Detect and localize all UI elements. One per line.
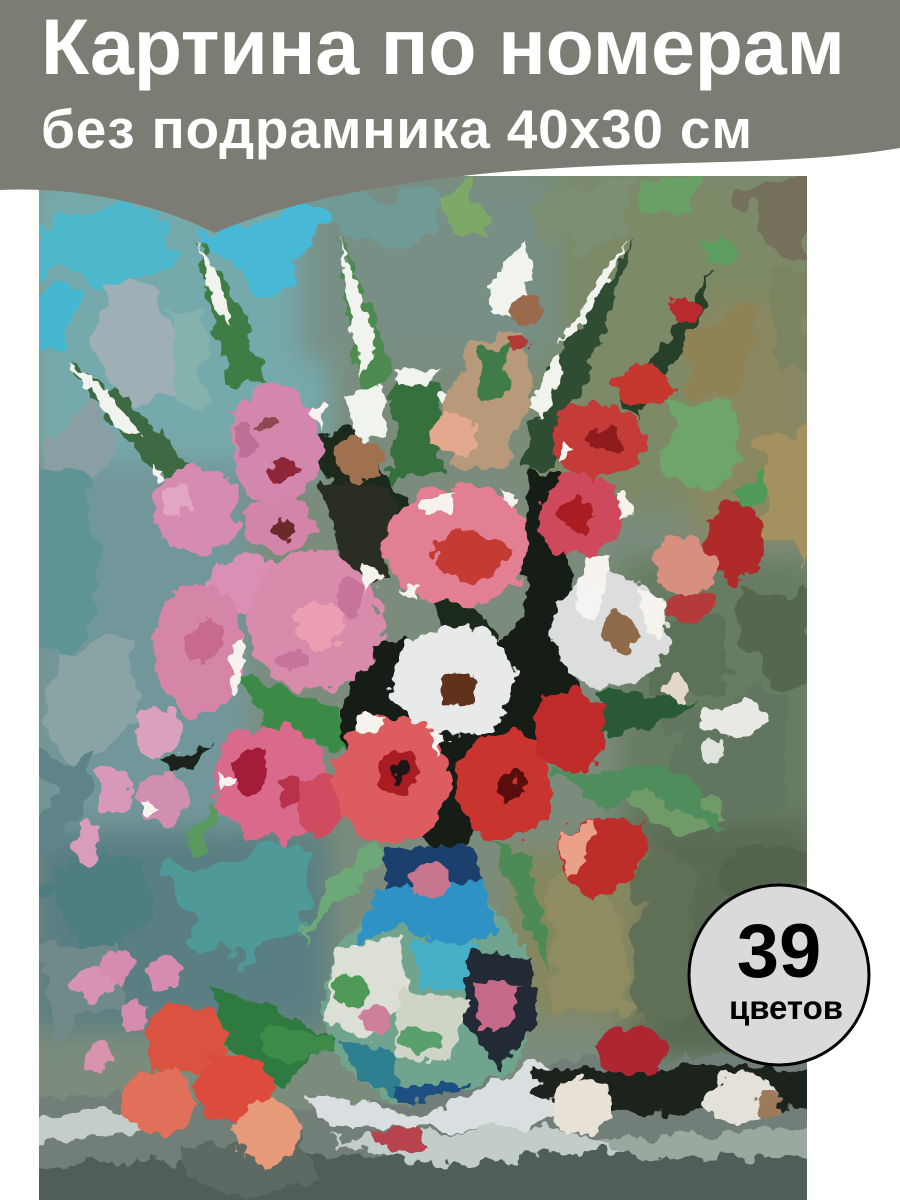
red flowers xyxy=(334,690,645,900)
header banner xyxy=(0,0,900,233)
red gladiolus flowers xyxy=(538,404,765,624)
badge: 39 colours: 39 xyxy=(737,909,821,994)
white leaf highlights xyxy=(68,237,630,445)
vase xyxy=(320,845,538,1108)
fallen flowers xyxy=(66,950,782,1164)
paint highlights on flowers xyxy=(140,400,665,820)
title: Картина по номерам xyxy=(41,2,845,91)
badge: 39 colours: цветов xyxy=(729,989,843,1026)
upper buds xyxy=(335,294,699,482)
painting background xyxy=(30,170,820,1060)
table xyxy=(30,1040,815,1200)
background paint patches xyxy=(30,170,815,1040)
subtitle: без подрамника 40х30 см xyxy=(41,98,752,160)
pink gladiolus flowers xyxy=(76,387,383,867)
white flowers xyxy=(393,560,769,762)
leaves and stems xyxy=(68,237,725,1090)
central coral flower xyxy=(384,485,532,605)
painting: gladioli in a vase xyxy=(30,170,820,1200)
badge: 39 colours xyxy=(689,885,869,1065)
